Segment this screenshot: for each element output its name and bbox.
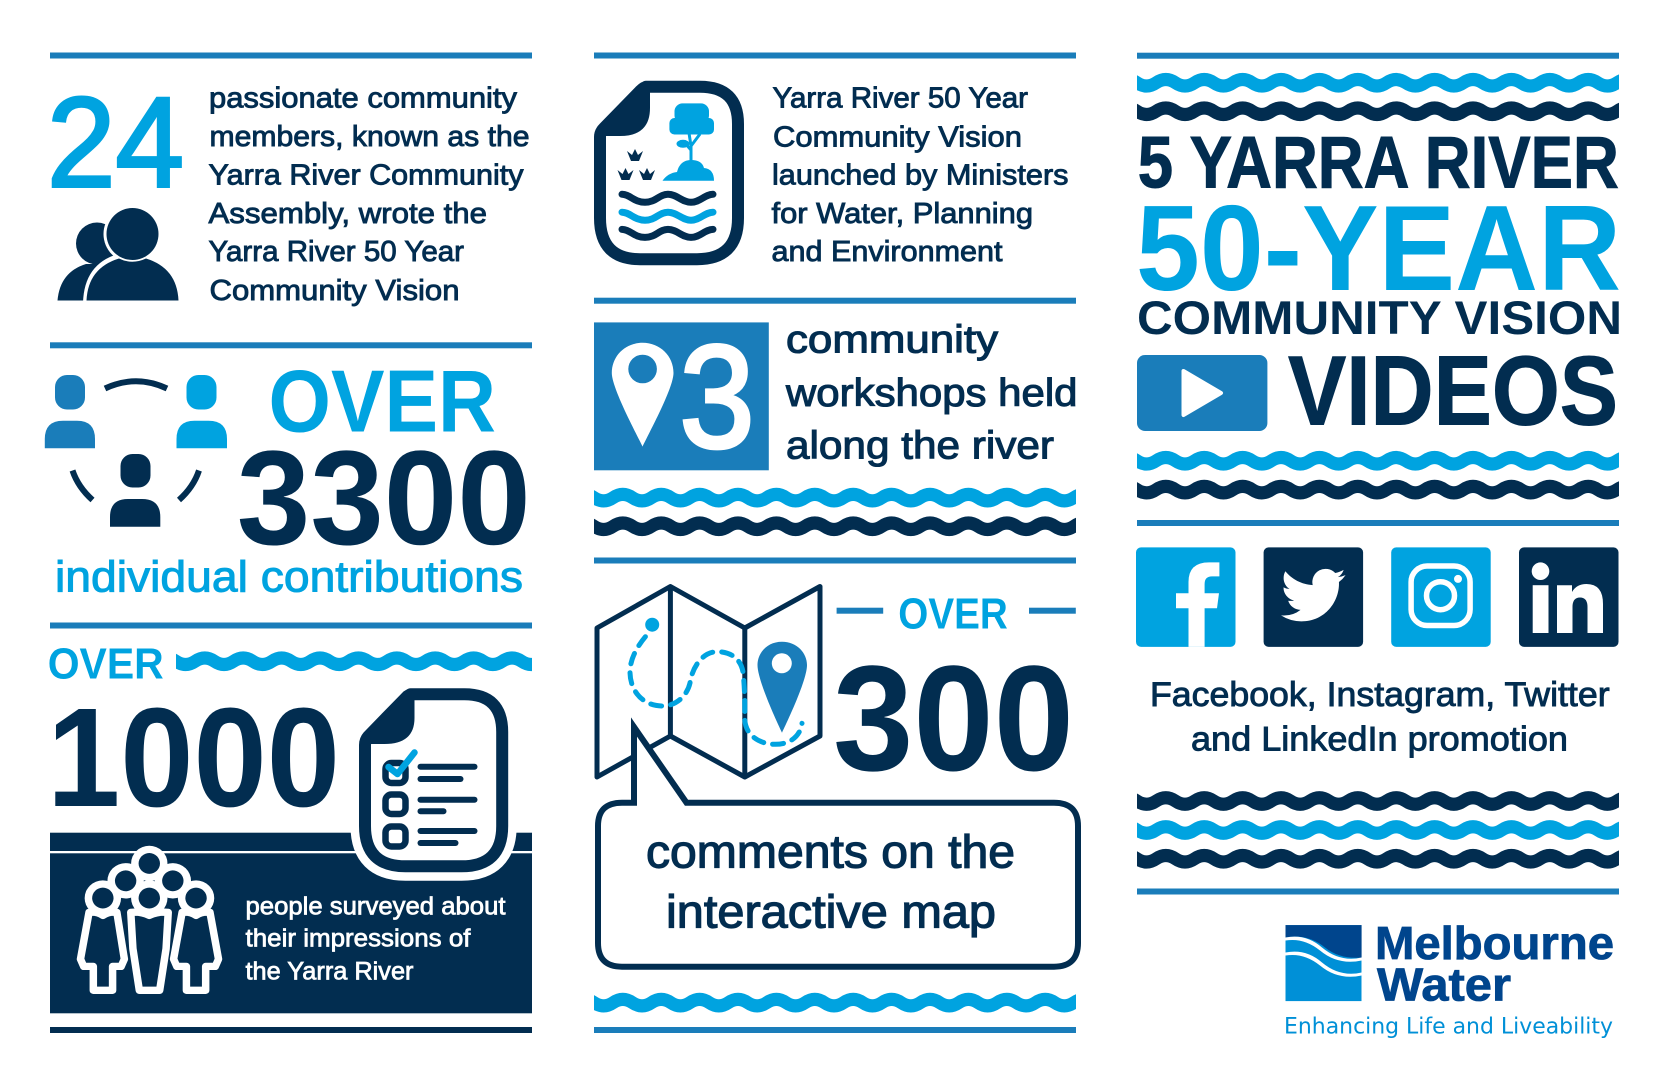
logo: Melbourne Water	[1284, 917, 1614, 1040]
icon: instagram	[1391, 547, 1491, 647]
text: vision launched: Community Vision	[773, 121, 1022, 153]
title: Videos: VIDEOS	[1288, 335, 1618, 445]
logo wordmark	[1375, 917, 1614, 1010]
text: people surveyed: their impressions of	[246, 925, 471, 953]
text: comments: comments on the	[646, 825, 1015, 877]
heading: OVER with dashes: OVER	[898, 589, 1008, 638]
icon: survey document	[364, 690, 502, 866]
text: comments	[646, 825, 1015, 938]
panel: social media	[1136, 520, 1619, 894]
text: individual contributions: individual contributions	[55, 552, 523, 602]
icon: three connected people	[45, 375, 227, 527]
text: workshops: community	[786, 318, 999, 361]
wave	[556, 999, 1093, 1006]
number 3300: 3300	[237, 424, 531, 573]
wave	[138, 658, 560, 665]
text: people surveyed	[246, 892, 506, 985]
heading: OVER: OVER	[268, 352, 496, 450]
text: people surveyed: the Yarra River	[246, 957, 414, 985]
panel: videos	[1099, 53, 1636, 493]
panel: over 1000 surveyed	[47, 622, 560, 1033]
speech bubble	[598, 727, 1078, 967]
text: workshops: workshops held	[785, 372, 1078, 415]
text: community members: Yarra River Community	[208, 159, 524, 191]
text: community members: Assembly, wrote the	[208, 198, 487, 230]
text: community members	[208, 82, 530, 307]
panel: over 300 comments	[556, 558, 1093, 1033]
text: promotion: Facebook, Instagram, Twitter	[1150, 676, 1610, 714]
heading: OVER with dashes	[837, 589, 1076, 638]
icon: vision document	[600, 84, 738, 259]
waves	[1099, 798, 1636, 862]
icon: group of people	[80, 846, 219, 990]
waves	[556, 494, 1093, 529]
icon: folded map	[597, 586, 820, 777]
icon: linkedin	[1519, 547, 1618, 647]
icon: twitter	[1264, 547, 1363, 647]
text: community members: Community Vision	[210, 275, 460, 307]
icon: facebook	[1136, 547, 1236, 647]
text: community members: Yarra River 50 Year	[208, 236, 464, 268]
heading: OVER: OVER	[48, 639, 164, 688]
panel: over 3300 contributions	[45, 342, 532, 602]
waves top	[1099, 80, 1636, 114]
badge: pin and number 3: 3	[680, 315, 754, 478]
text: people surveyed: people surveyed about	[246, 892, 506, 920]
navy band	[50, 833, 532, 1013]
logo tagline: Enhancing Life and Liveability	[1284, 1015, 1613, 1040]
title: Community Vision: COMMUNITY VISION	[1137, 291, 1622, 344]
text: vision launched: for Water, Planning	[772, 198, 1033, 230]
number 24: 24	[47, 72, 184, 214]
panel: 3 community workshops	[556, 298, 1093, 529]
text: workshops	[785, 318, 1078, 468]
waves middle	[1099, 458, 1636, 493]
icon: play button	[1137, 355, 1267, 431]
text: community members: members, known as the	[210, 121, 530, 153]
text: promotion: and LinkedIn promotion	[1191, 721, 1568, 759]
panel: vision launched	[594, 52, 1076, 268]
number 1000: 1000	[47, 678, 340, 836]
text: community members: passionate community	[209, 82, 518, 114]
number 300: 300	[833, 634, 1074, 802]
text: vision launched: and Environment	[772, 236, 1002, 268]
logo wordmark: Melbourne	[1375, 917, 1614, 969]
text: promotion	[1150, 676, 1610, 759]
logo wordmark: Water	[1377, 958, 1511, 1010]
title: 50-Year: 50-YEAR	[1136, 180, 1621, 316]
text: vision launched: launched by Ministers	[772, 159, 1068, 191]
badge: pin and number 3	[594, 315, 769, 478]
text: vision launched	[772, 82, 1068, 268]
text: comments: interactive map	[666, 886, 996, 938]
icon: two people	[58, 205, 178, 303]
text: vision launched: Yarra River 50 Year	[772, 82, 1028, 114]
logo mark	[1286, 925, 1362, 1001]
panel: 24 community members	[47, 52, 532, 307]
text: workshops: along the river	[786, 425, 1054, 468]
